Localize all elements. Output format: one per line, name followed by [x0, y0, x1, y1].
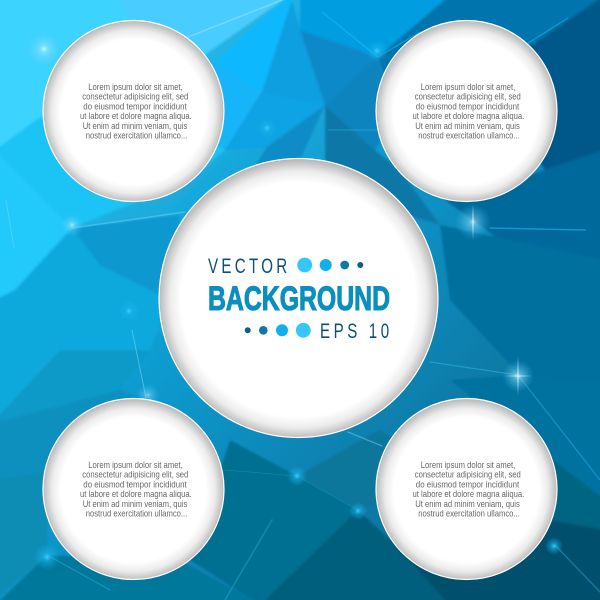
dots: bottom row — [245, 323, 311, 338]
panel: central circle — [159, 158, 438, 438]
panel: top-right circle — [376, 20, 557, 202]
text block: top-right lorem ipsum: Ut enim ad minim veniam, quis — [415, 120, 520, 131]
text block: bottom-right lorem ipsum: Lorem ipsum dolor sit amet, — [421, 459, 515, 470]
heading: VECTOR: VECTOR — [208, 253, 287, 278]
text block: top-left lorem ipsum: Ut enim ad minim veniam, quis — [83, 120, 188, 131]
text block: bottom-left lorem ipsum — [80, 459, 192, 518]
panel: bottom-right circle — [376, 398, 557, 580]
text block: top-right lorem ipsum: nostrud exercitation ullamco... — [418, 130, 520, 140]
text block: bottom-left lorem ipsum: consectetur adipisicing elit, sed — [82, 469, 188, 480]
text block: bottom-left lorem ipsum: do eiusmod tempor incididunt — [83, 478, 187, 489]
heading: EPS 10: EPS 10 — [320, 318, 389, 343]
text block: top-right lorem ipsum: Lorem ipsum dolor sit amet, — [421, 81, 515, 92]
text block: top-right lorem ipsum — [412, 81, 524, 140]
text block: top-left lorem ipsum: Lorem ipsum dolor sit amet, — [88, 81, 183, 92]
text block: top-left lorem ipsum: do eiusmod tempor incididunt — [83, 100, 187, 111]
text block: bottom-left lorem ipsum: ut labore et dolore magna aliqua. — [80, 488, 192, 499]
text block: bottom-right lorem ipsum: do eiusmod tempor incididunt — [416, 478, 520, 489]
text block: bottom-left lorem ipsum: nostrud exercitation ullamco... — [86, 508, 187, 518]
heading: BACKGROUND: BACKGROUND — [208, 280, 390, 318]
panel: bottom-left circle — [43, 398, 224, 580]
text block: top-right lorem ipsum: ut labore et dolore magna aliqua. — [412, 110, 524, 121]
text block: top-right lorem ipsum: consectetur adipisicing elit, sed — [415, 91, 521, 102]
text block: bottom-right lorem ipsum: consectetur adipisicing elit, sed — [415, 469, 521, 480]
text block: top-left lorem ipsum — [80, 81, 192, 140]
text block: top-left lorem ipsum: nostrud exercitation ullamco... — [86, 130, 187, 140]
panel: top-left circle — [43, 20, 224, 202]
text block: top-left lorem ipsum: ut labore et dolore magna aliqua. — [80, 110, 192, 121]
text block: top-left lorem ipsum: consectetur adipisicing elit, sed — [82, 91, 188, 102]
dots: top row — [297, 258, 363, 272]
text block: bottom-left lorem ipsum: Lorem ipsum dolor sit amet, — [88, 459, 183, 470]
text block: bottom-right lorem ipsum — [412, 459, 524, 518]
text block: bottom-right lorem ipsum: Ut enim ad minim veniam, quis — [415, 498, 520, 509]
text block: top-right lorem ipsum: do eiusmod tempor incididunt — [416, 100, 520, 111]
text block: bottom-right lorem ipsum: nostrud exercitation ullamco... — [418, 508, 520, 518]
text block: bottom-left lorem ipsum: Ut enim ad minim veniam, quis — [83, 498, 188, 509]
text block: bottom-right lorem ipsum: ut labore et dolore magna aliqua. — [412, 488, 524, 499]
